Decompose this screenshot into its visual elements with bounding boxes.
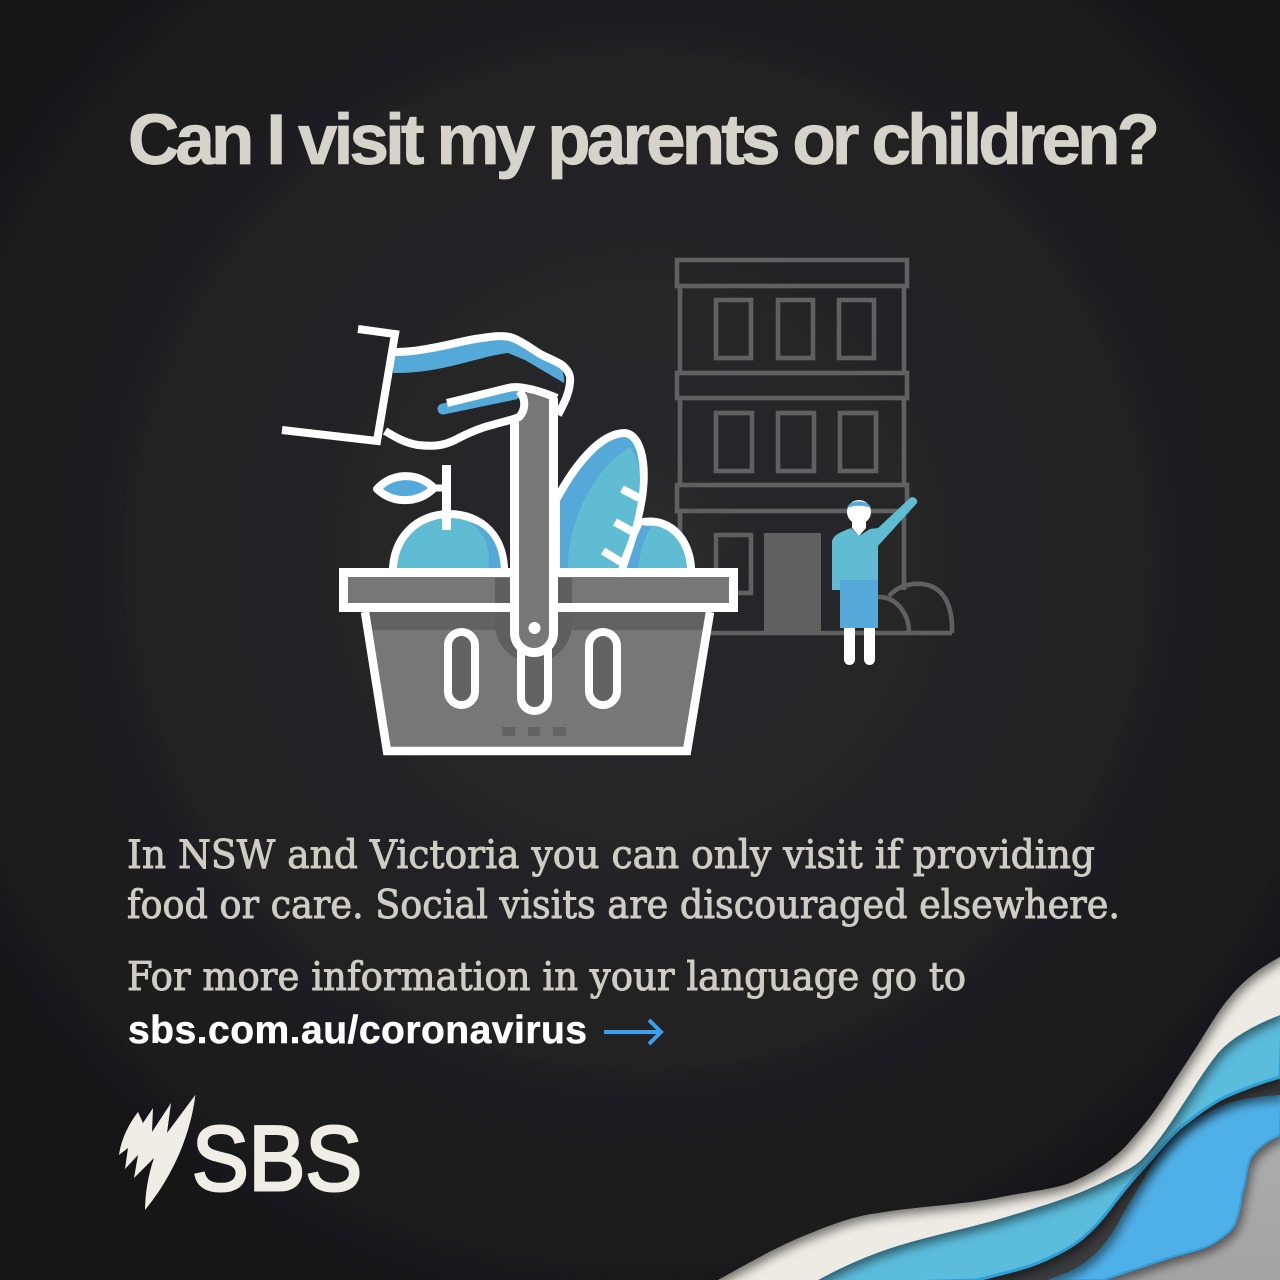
icon: SBS mark [119,1095,195,1210]
basket handle [514,391,554,653]
body text: For more information in your language go to [127,955,966,1000]
body text [127,833,1120,1000]
arrow [604,1020,661,1044]
hand holding handle [282,329,570,446]
baguette [556,433,644,582]
fruit: round loaf [620,522,691,580]
shopping basket [344,572,734,752]
small bush [877,597,909,633]
SBS logo [119,1095,362,1210]
person waving [832,497,917,665]
bushes [889,584,952,633]
building outline [677,260,952,633]
SBS logo: SBS [192,1108,362,1210]
round loaf shading [622,525,652,570]
body text: food or care. Social visits are discouraged elsewhere. [127,883,1120,928]
title: Can I visit my parents or children? [128,101,1160,180]
website link: sbs.com.au/coronavirus [128,1009,587,1052]
body text: In NSW and Victoria you can only visit if providing [127,833,1095,878]
fruit: apple with leaf [377,465,504,580]
